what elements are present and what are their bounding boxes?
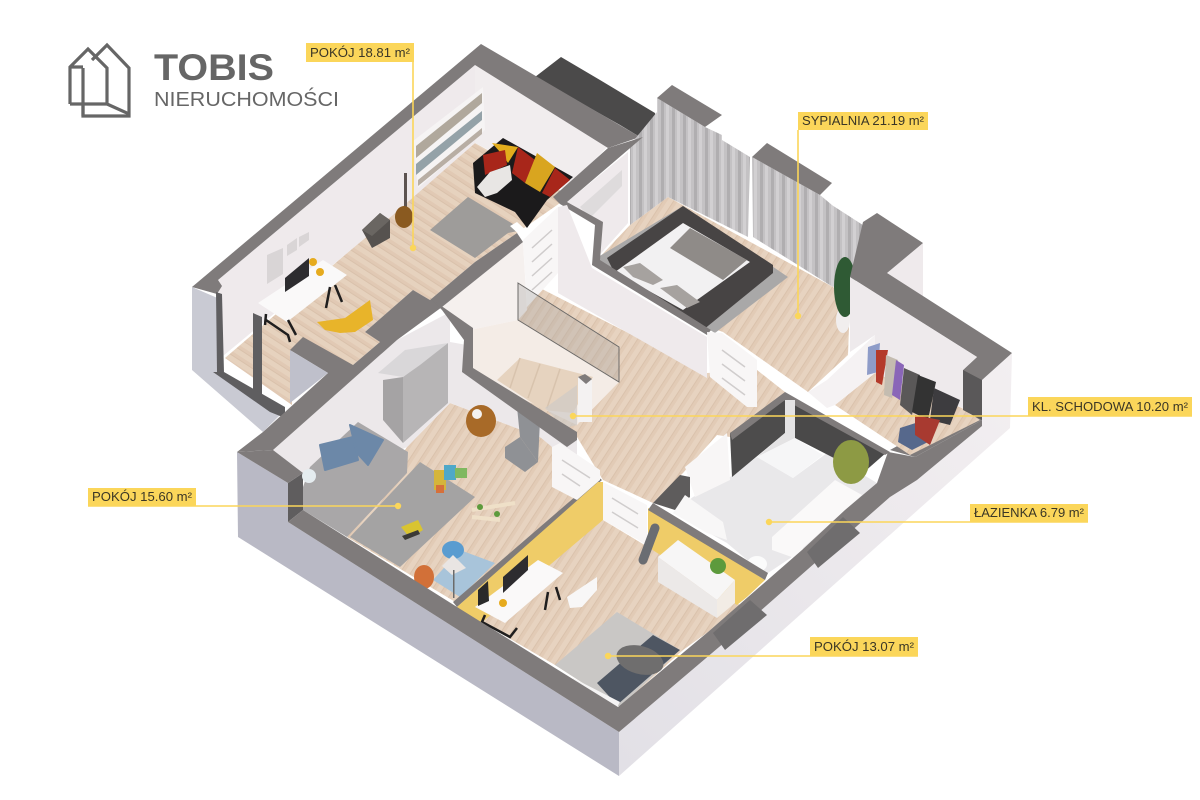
leader	[605, 653, 918, 659]
box	[1028, 397, 1192, 416]
icon: house outline	[70, 45, 129, 116]
bed	[607, 206, 773, 330]
blue chair	[442, 541, 464, 559]
amplifier	[362, 213, 390, 248]
room: pokój 15.60	[273, 312, 602, 607]
small dark wall	[653, 475, 690, 510]
floor	[347, 403, 600, 603]
partition wall top	[453, 477, 602, 607]
logo	[70, 45, 339, 116]
toilet	[747, 556, 767, 572]
clothes	[867, 343, 960, 450]
curtains right	[752, 157, 888, 287]
divider	[808, 335, 875, 408]
partition	[648, 503, 768, 580]
wall tops	[192, 44, 640, 294]
small exterior block	[290, 350, 328, 403]
brand subtitle: NIERUCHOMOŚCI	[154, 87, 339, 111]
exterior walls	[237, 243, 1012, 776]
value: POKÓJ 13.07 m²	[814, 639, 914, 654]
window west	[713, 600, 767, 650]
wardrobe corner wall top	[850, 213, 1012, 457]
door	[603, 482, 647, 545]
bath wall top	[730, 392, 890, 455]
label: łazienka 6.79	[766, 504, 1088, 525]
room: pokój 18.81	[192, 44, 640, 432]
floor	[673, 453, 877, 575]
wall stub 2	[752, 143, 832, 195]
partition wall	[558, 205, 707, 378]
right exterior wall	[619, 353, 1012, 776]
wall	[273, 312, 577, 480]
leader	[795, 130, 801, 319]
back wall	[850, 277, 977, 408]
pictures	[267, 232, 309, 284]
door frame top	[510, 222, 528, 238]
stone wall left	[730, 400, 785, 477]
value: SYPIALNIA 21.19 m²	[802, 114, 924, 128]
giraffe toy	[466, 405, 496, 437]
glass railing	[518, 283, 619, 382]
stair wall band	[430, 298, 577, 447]
left interior wall	[218, 65, 475, 356]
north wall band	[237, 233, 523, 452]
window east	[807, 517, 860, 568]
gate top right	[707, 332, 757, 407]
room: klatka schodowa 10.20	[442, 205, 785, 503]
rug	[350, 462, 475, 567]
floor	[597, 197, 850, 392]
poster	[580, 170, 622, 218]
orange stool	[414, 565, 434, 589]
gate left	[552, 443, 600, 500]
value: ŁAZIENKA 6.79 m²	[974, 506, 1084, 520]
value: KL. SCHODOWA 10.20 m²	[1032, 400, 1188, 414]
shower glass	[757, 400, 795, 457]
curtains left	[630, 98, 750, 237]
dark wall end	[963, 370, 982, 420]
corner piece	[237, 450, 303, 483]
skateboard	[643, 528, 655, 560]
bed	[302, 422, 408, 537]
glass panel	[545, 385, 577, 428]
bookshelf	[413, 87, 485, 188]
exterior end wall	[192, 287, 283, 432]
south wall band	[288, 420, 982, 732]
bathtub	[772, 480, 862, 560]
plant	[834, 257, 856, 333]
small plant	[710, 558, 726, 574]
lamp	[442, 555, 466, 598]
leader	[570, 413, 1192, 419]
toy truck	[401, 520, 423, 540]
label: pokój 13.07	[605, 637, 918, 659]
wall top	[553, 137, 711, 335]
white chair	[567, 577, 597, 608]
floor	[467, 288, 785, 503]
label: pokój 18.81	[306, 43, 416, 251]
floor	[225, 143, 570, 405]
box	[306, 43, 414, 62]
leader	[766, 519, 1088, 525]
leader	[410, 62, 416, 251]
leader	[88, 503, 401, 509]
rug	[593, 206, 788, 333]
exterior stub behind bedroom	[887, 243, 923, 297]
yellow wall	[457, 482, 603, 630]
room: pokój 13.07	[457, 443, 765, 707]
yellow armchair	[317, 300, 373, 333]
box	[810, 637, 918, 656]
dark wall end	[288, 473, 303, 522]
label: klatka schodowa 10.20	[570, 397, 1192, 419]
desk	[475, 555, 563, 637]
room: łazienka 6.79	[648, 392, 890, 580]
rug	[430, 197, 523, 258]
room: sypialnia 21.19	[553, 85, 1012, 457]
room: garderoba	[808, 277, 982, 455]
dark roof patch	[535, 57, 657, 137]
label: sypialnia 21.19	[795, 112, 928, 319]
window panes	[722, 127, 863, 225]
right interior wall	[475, 65, 608, 190]
brand name: TOBIS	[154, 47, 274, 88]
bed	[573, 635, 680, 707]
toy track	[472, 503, 515, 520]
sofa	[473, 138, 573, 228]
guitar	[395, 173, 413, 228]
stairs	[497, 358, 593, 413]
blocks	[434, 465, 467, 493]
door	[685, 433, 730, 497]
left exterior wall	[237, 452, 619, 776]
shower tray	[757, 438, 823, 478]
box	[970, 504, 1088, 522]
value: POKÓJ 15.60 m²	[92, 489, 192, 504]
post cap	[578, 374, 592, 384]
box	[88, 488, 196, 506]
side wall	[567, 152, 628, 260]
desk	[258, 258, 347, 342]
blue table	[433, 550, 495, 597]
wardrobe	[378, 343, 448, 443]
label: pokój 15.60	[88, 488, 401, 509]
floor	[835, 373, 980, 455]
lower stair well	[467, 320, 619, 425]
post	[578, 377, 592, 422]
left wall	[442, 242, 527, 330]
sink	[673, 495, 727, 540]
door	[523, 207, 558, 307]
floor	[473, 520, 740, 707]
rug	[555, 612, 680, 707]
window frame	[213, 292, 285, 418]
value: POKÓJ 18.81 m²	[310, 45, 410, 60]
wall stub 1	[657, 85, 722, 127]
box	[798, 112, 928, 130]
cabinet	[658, 540, 735, 618]
grey armchair	[505, 407, 540, 472]
plant	[833, 440, 869, 484]
stone wall right	[795, 400, 887, 473]
yellow wall right	[648, 508, 765, 605]
outer wall bands	[237, 233, 982, 732]
